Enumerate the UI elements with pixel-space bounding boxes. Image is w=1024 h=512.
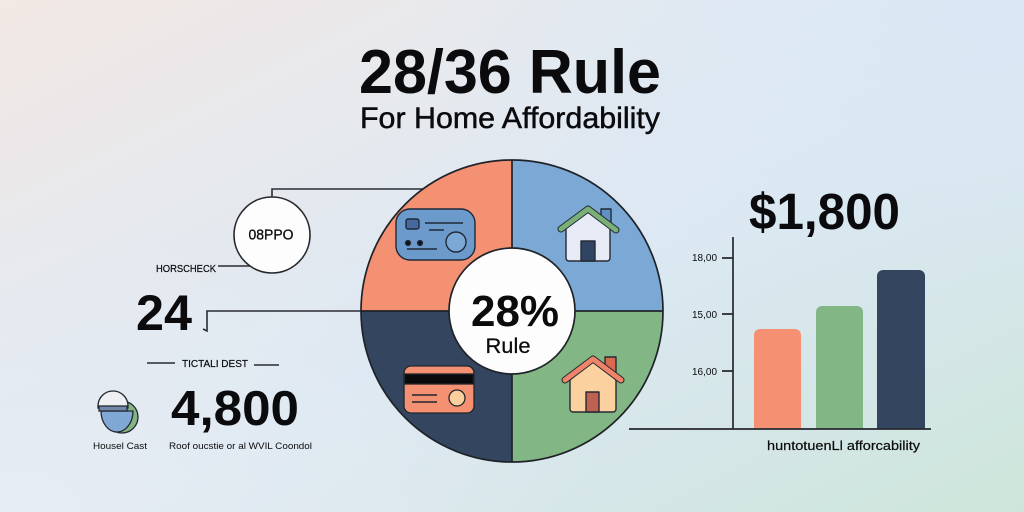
center badge: 28% rule [449,248,575,374]
label: roof caption: Roof oucstie or al WVIL Coondol [169,441,312,452]
connector: 24 to pie [203,311,365,331]
icon: house orange roof [565,357,621,412]
connector: circle to pie [272,189,425,198]
callout circle: 08PPO [248,226,294,244]
slice: coral [361,160,512,311]
label: house cost: Housel Cast [93,441,147,452]
slice: blue [512,160,663,311]
title: 28/36 Rule [359,38,661,107]
center badge: 28% rule: 28% [471,287,559,336]
bar: green [816,306,863,429]
icon: house green roof [561,208,616,261]
slice: navy [361,311,512,462]
y axis labels: 18,00 [692,253,717,264]
y axis labels: 16,00 [692,367,717,378]
bar: navy [877,270,925,429]
connector: horscheck label to circle [218,265,250,267]
icon: id card [396,209,475,260]
icon: house cost [98,391,138,433]
number: $1,800: $1,800 [749,183,900,240]
y axis labels [692,253,717,378]
slice: green [512,311,663,462]
pie outline [361,160,663,462]
subtitle: For Home Affordability [360,102,660,135]
label: total debt [147,359,279,370]
chart axes [629,237,931,429]
number: 4,800: 4,800 [171,382,299,436]
pie chart [361,160,663,462]
icon: credit card [404,366,474,413]
chart caption: huntotuenLl afforcability [767,438,921,453]
number: 24: 24 [136,285,192,341]
y axis labels: 15,00 [692,310,717,321]
label: horscheck: HORSCHECK [156,264,216,275]
label: total debt: TICTALI DEST [182,359,248,370]
center badge: 28% rule: Rule [486,335,530,358]
bar: coral [754,329,801,429]
panel: left callouts [93,189,425,452]
callout circle [234,197,310,273]
panel: bar chart [629,183,931,453]
